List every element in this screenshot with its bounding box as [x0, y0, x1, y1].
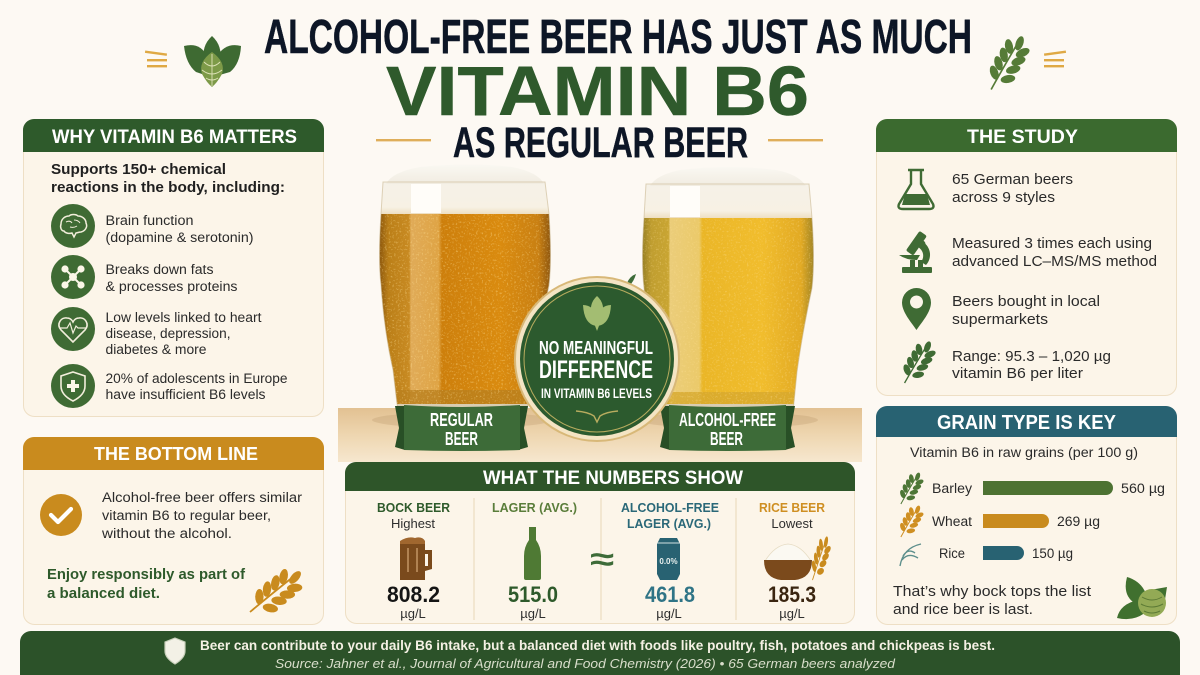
column: bock beer: Highest [391, 516, 435, 531]
row: barley: 560 µg [1121, 481, 1165, 496]
panel header: WHAT THE NUMBERS SHOW [483, 468, 743, 489]
text: 65 beers: across 9 styles [952, 190, 1055, 206]
text: fats and proteins [106, 262, 238, 294]
icon: flask [898, 170, 934, 209]
text: enjoy responsibly: a balanced diet. [47, 586, 160, 602]
panel: the bottom line [23, 437, 324, 627]
icon: 0.0% can: 0.0% [659, 557, 678, 566]
column: bock beer [377, 500, 451, 621]
column: alcohol-free lager: µg/L [656, 606, 682, 621]
column: rice beer: RICE BEER [759, 500, 826, 515]
panel header: THE STUDY [967, 126, 1078, 148]
text: brain function: (dopamine & serotonin) [106, 230, 254, 245]
column: rice beer: 185.3 [768, 582, 816, 607]
illustration: regular beer glass [372, 164, 555, 428]
text: low levels [106, 310, 262, 357]
badge text: NO MEANINGFUL [539, 337, 653, 358]
icon: golden wheat [247, 558, 309, 627]
text: bought: Beers bought in local [952, 294, 1100, 310]
panel header: WHY VITAMIN B6 MATTERS [52, 127, 297, 148]
icon: shield [165, 638, 185, 664]
text: fats and proteins: & processes proteins [106, 279, 238, 294]
source line: Source: Jahner et al., Journal of Agricultural and Food Chemistry (2026) • 65 German beers analyzed [275, 657, 896, 671]
row: wheat: Wheat [932, 514, 972, 529]
icon: gold dashes right [1044, 50, 1066, 67]
column: alcohol-free lager: 461.8 [645, 582, 695, 607]
text: summary: Alcohol-free beer offers similar [102, 490, 303, 505]
column: alcohol-free lager: LAGER (AVG.) [627, 516, 711, 531]
column: lager: 515.0 [508, 582, 558, 607]
intro text: reactions in the body, including: [51, 179, 285, 196]
icon: hop leaves [1117, 577, 1167, 619]
ribbon: regular beer: BEER [445, 429, 478, 449]
icon: wheat sprig right of title [988, 35, 1031, 90]
chart subtitle: Vitamin B6 in raw grains (per 100 g) [910, 445, 1138, 460]
text: range [952, 349, 1111, 382]
text: low levels: diabetes & more [106, 342, 206, 357]
icon: leaf sprig [902, 341, 937, 383]
column: bock beer: BOCK BEER [377, 500, 451, 515]
ribbon: regular beer [395, 405, 528, 451]
text: adolescents: 20% of adolescents in Europe [106, 371, 288, 386]
column: rice beer: µg/L [779, 606, 805, 621]
column: lager [492, 500, 577, 621]
panel header [23, 437, 324, 470]
icon: badge leaf [583, 296, 611, 331]
badge text [539, 337, 653, 401]
row: barley: Barley [932, 481, 972, 496]
text: conclusion: and rice beer is last. [893, 602, 1033, 618]
title line 2: vitamin B6: VITAMIN B6 [386, 52, 809, 130]
ribbon: alcohol-free beer [660, 405, 795, 451]
panel header: GRAIN TYPE IS KEY [937, 412, 1117, 434]
row: rice [900, 544, 1073, 566]
text: measured: advanced LC–MS/MS method [952, 254, 1157, 270]
footer message: Beer can contribute to your daily B6 intake, but a balanced diet with foods like poultry, fish, potatoes and chickpeas is best. [200, 638, 995, 653]
title line 3: AS REGULAR BEER [453, 119, 748, 167]
icon: hop cone left of title [184, 36, 241, 87]
text: summary: without the alcohol. [101, 526, 232, 541]
icon: brain [51, 204, 95, 248]
column: alcohol-free lager: ALCOHOL-FREE [621, 500, 719, 515]
wooden table [338, 408, 862, 462]
badge text: IN VITAMIN B6 LEVELS [541, 386, 652, 401]
text: brain function: Brain function [106, 213, 194, 228]
text: bought [952, 294, 1100, 328]
panel header [23, 119, 324, 152]
icon: rice bowl [764, 544, 812, 580]
column: rice beer [759, 500, 831, 621]
column: bock beer: 808.2 [387, 582, 440, 607]
text: low levels: disease, depression, [106, 326, 230, 341]
panel header [876, 406, 1177, 437]
text: fats and proteins: Breaks down fats [106, 262, 214, 277]
text: enjoy responsibly: Enjoy responsibly as part of [47, 567, 245, 583]
row: rice: Rice [939, 546, 965, 561]
icon: wheat ear [811, 535, 831, 580]
intro text [51, 161, 285, 196]
text: enjoy responsibly [47, 567, 245, 602]
intro text: Supports 150+ chemical [51, 161, 226, 178]
text: 65 beers: 65 German beers [952, 172, 1073, 188]
icon: heart [51, 307, 95, 351]
icon: green bottle [524, 527, 541, 580]
column: bock beer: µg/L [400, 606, 426, 621]
text: conclusion [893, 584, 1091, 618]
panel: grain type is key [876, 406, 1177, 624]
title [264, 11, 972, 167]
panel header [345, 462, 855, 491]
row: wheat: 269 µg [1057, 514, 1100, 529]
ribbon: alcohol-free beer: ALCOHOL-FREE [679, 410, 776, 430]
text: 65 beers [952, 172, 1073, 206]
panel: what the numbers show [345, 462, 855, 624]
text: measured: Measured 3 times each using [952, 236, 1152, 252]
panel: why vitamin B6 matters [23, 119, 324, 416]
column: lager: µg/L [520, 606, 546, 621]
icon: microscope [899, 231, 932, 273]
text: brain function [106, 213, 254, 245]
title accent rule right [768, 139, 823, 141]
panel header: THE BOTTOM LINE [94, 443, 258, 464]
row: rice: 150 µg [1032, 546, 1073, 561]
icon: location pin [902, 288, 931, 330]
row: wheat [899, 505, 1100, 537]
badge text: DIFFERENCE [539, 356, 653, 384]
icon: molecule [51, 255, 95, 299]
text: adolescents: have insufficient B6 levels [106, 387, 266, 402]
approximately equal sign: ≈ [590, 541, 614, 577]
text: low levels: Low levels linked to heart [106, 310, 262, 325]
text: adolescents [106, 371, 288, 402]
ribbon: alcohol-free beer: BEER [710, 429, 743, 449]
title accent rule left [376, 139, 431, 141]
icon: shield [51, 364, 95, 408]
text: measured [952, 236, 1157, 270]
text: range: vitamin B6 per liter [952, 366, 1083, 382]
icon: gold dashes left [145, 50, 167, 67]
text: bought: supermarkets [952, 312, 1048, 328]
text: range: Range: 95.3 – 1,020 µg [952, 349, 1111, 365]
row: barley [899, 472, 1165, 504]
column: alcohol-free lager [621, 500, 719, 621]
text: conclusion: That’s why bock tops the list [893, 584, 1091, 600]
ribbon: regular beer: REGULAR [430, 410, 493, 430]
text: summary: vitamin B6 to regular beer, [102, 508, 271, 523]
footer banner [20, 631, 1180, 675]
illustration: alcohol-free beer glass [638, 167, 818, 428]
badge: no meaningful difference [515, 274, 679, 441]
panel: the study [876, 119, 1177, 396]
column: rice beer: Lowest [771, 516, 813, 531]
icon: beer mug [400, 537, 432, 580]
icon: check mark [40, 494, 82, 536]
text: summary [101, 490, 303, 541]
bar chart [899, 472, 1165, 566]
panel header [876, 119, 1177, 152]
column: lager: LAGER (AVG.) [492, 500, 577, 515]
